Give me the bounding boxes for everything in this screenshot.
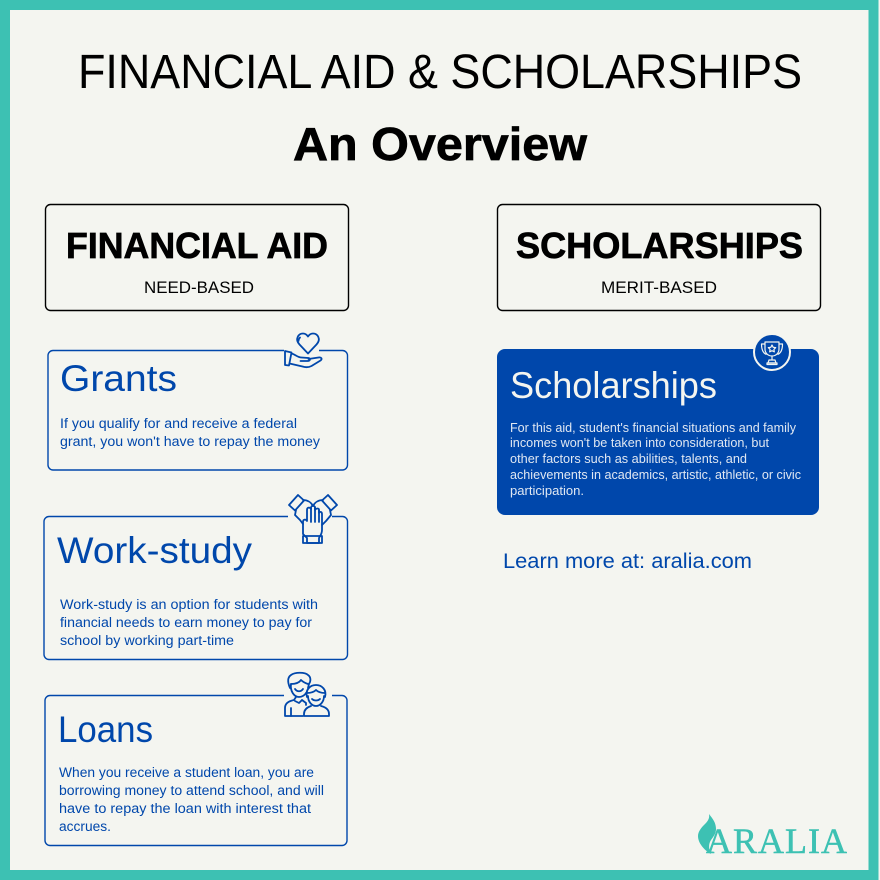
- heading: scholarships: SCHOLARSHIPS: [516, 225, 803, 266]
- heading: work-study: Work-study: [57, 530, 253, 571]
- icon: joined hands: [289, 495, 337, 543]
- link text: learn more: Learn more at: aralia.com: [503, 550, 752, 573]
- panel: grants: [48, 334, 348, 470]
- text: loans description: When you receive a student loan, you are: [59, 765, 314, 780]
- text: scholarships description: [510, 421, 801, 498]
- label: need-based: NEED-BASED: [144, 278, 254, 297]
- label: merit-based: MERIT-BASED: [601, 278, 717, 297]
- text: work-study description: school by working part-time: [60, 633, 234, 648]
- text: loans description: accrues.: [59, 819, 111, 834]
- panel: scholarships heading: [498, 204, 820, 310]
- text: scholarships description: incomes won't be taken into consideration, but: [510, 436, 770, 450]
- panel: financial aid heading: [46, 204, 348, 310]
- text: work-study description: Work-study is an option for students with: [60, 597, 318, 612]
- panel: loans: [45, 673, 347, 846]
- icon: logo flame: [698, 814, 716, 854]
- logo: Aralia: [698, 814, 847, 861]
- text: loans description: borrowing money to attend school, and will: [59, 783, 324, 798]
- panel: scholarships card: [497, 334, 819, 515]
- text: work-study description: financial needs to earn money to pay for: [60, 615, 313, 630]
- heading: loans: Loans: [58, 709, 153, 750]
- text: grants description: grant, you won't have to repay the money: [60, 434, 320, 449]
- heading: grants: Grants: [60, 358, 177, 399]
- panel: work-study: [44, 495, 348, 660]
- icon: two smiling people: [285, 673, 329, 716]
- text: scholarships description: achievements in academics, artistic, athletic, or civic: [510, 468, 801, 482]
- wordmark: ARALIA: [706, 821, 847, 861]
- text: scholarships description: other factors such as abilities, talents, and: [510, 452, 747, 466]
- text: work-study description: [60, 597, 318, 648]
- icon: heart in hand: [285, 334, 322, 367]
- text: grants description: [60, 416, 320, 449]
- heading: financial aid: FINANCIAL AID: [66, 225, 328, 266]
- text: loans description: [59, 765, 324, 834]
- heading: scholarships: Scholarships: [510, 365, 717, 406]
- text: scholarships description: For this aid, student's financial situations and family: [510, 421, 797, 435]
- text: grants description: If you qualify for and receive a federal: [60, 416, 297, 431]
- icon: trophy badge: [754, 334, 790, 370]
- subtitle: An Overview: [293, 118, 587, 170]
- text: scholarships description: participation.: [510, 484, 584, 498]
- title: FINANCIAL AID & SCHOLARSHIPS: [78, 46, 802, 99]
- text: loans description: have to repay the loan with interest that: [59, 801, 311, 816]
